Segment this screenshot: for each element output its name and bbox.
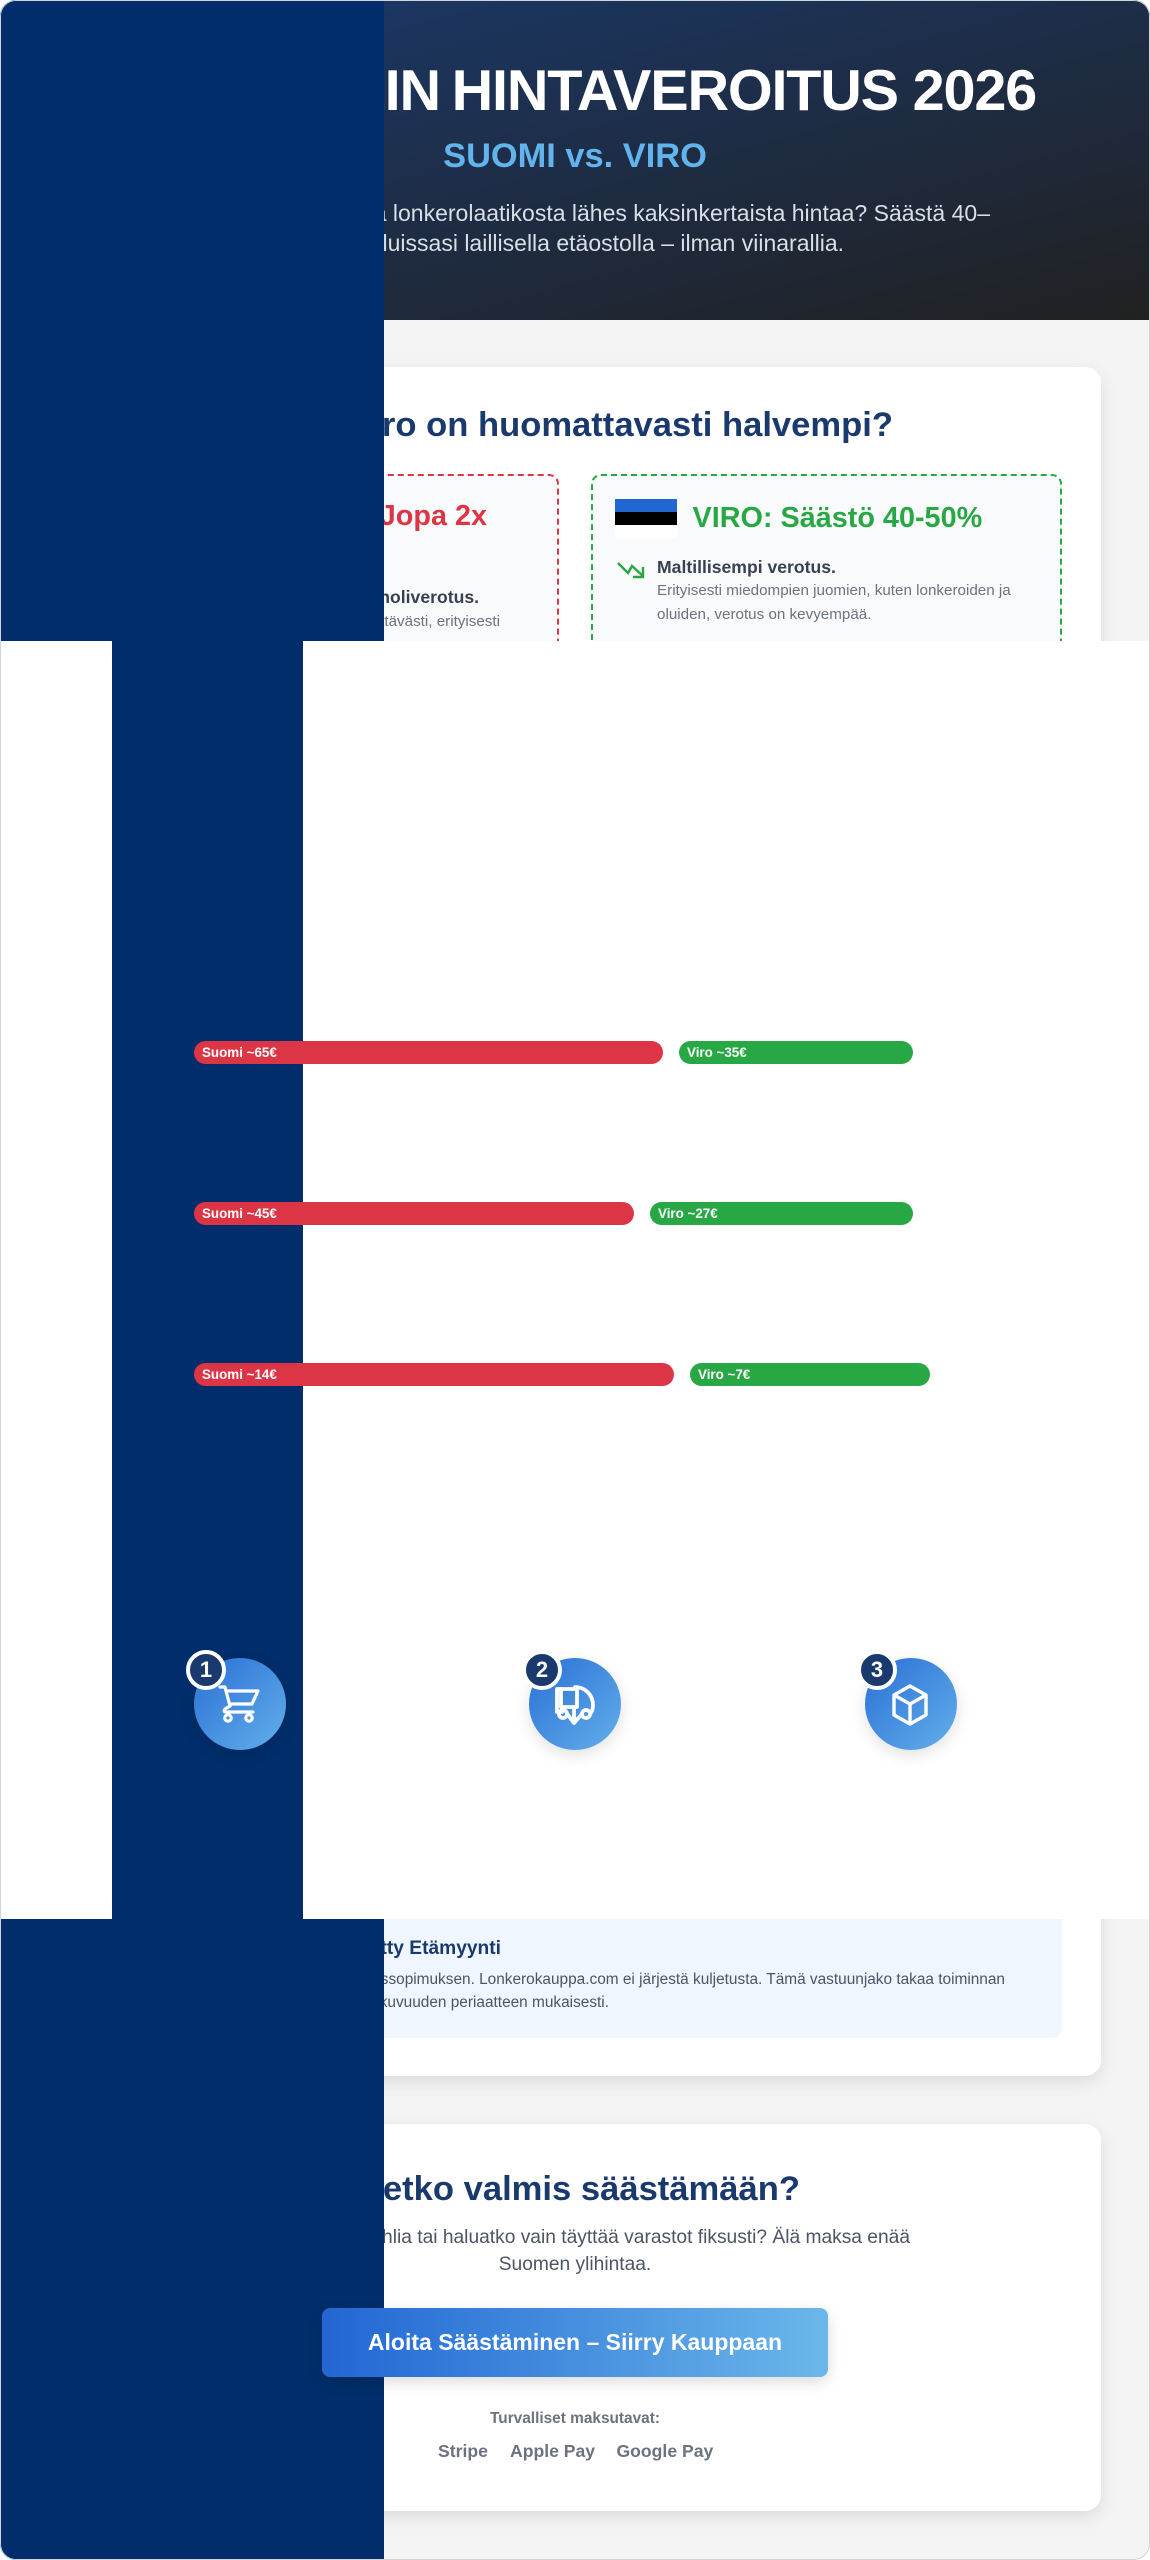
bar: Estonia 35: Viro ~35€ <box>687 1045 747 1060</box>
payment: Google Pay: Google Pay <box>616 2441 713 2461</box>
panel: Estonia <box>590 474 1062 1574</box>
panel: why Estonia is cheaper <box>49 367 1101 2076</box>
step 2 badge <box>522 1650 562 1690</box>
callout title: Laillisesti Toteutetty Etämyynti <box>220 1938 501 1959</box>
icon: cart <box>218 1685 260 1723</box>
bar: Finland 14 <box>194 1363 674 1386</box>
step 2 icon circle <box>529 1658 621 1750</box>
Estonia point text: Erityisesti miedompien juomien, kuten lonkeroiden ja <box>657 582 1011 599</box>
panel: Finland <box>88 474 559 1574</box>
bar: Estonia 27: Viro ~27€ <box>658 1206 718 1221</box>
icon: Estonian flag <box>615 499 677 525</box>
intro line 2: 50% kuluissasi laillisella etäostolla – ilman viinarallia. <box>306 230 844 256</box>
intro line 1: Miksi maksaa lonkerolaatikosta lähes kaksinkertaista hintaa? Säästä 40– <box>247 200 990 226</box>
payment: Apple Pay: Apple Pay <box>510 2441 595 2461</box>
bar: Finland 14: Suomi ~14€ <box>202 1367 277 1382</box>
step 3 icon circle <box>864 1658 956 1750</box>
blue masking block <box>0 0 384 2560</box>
chart: price comparison bars <box>194 1041 930 1386</box>
icon: box <box>892 1684 928 1726</box>
heading: Miksi Viro on huomattavasti halvempi? <box>254 406 893 444</box>
step 1 badge: 1 <box>200 1657 212 1682</box>
Estonia point title: Maltillisempi verotus. <box>657 557 836 577</box>
callout text line 2: vapaan liikkuvuuden periaatteen mukaisesti. <box>307 1994 609 2011</box>
subtitle: SUOMI vs. VIRO <box>443 137 707 175</box>
step 3 badge <box>857 1650 897 1690</box>
bar: Finland 65 <box>194 1041 663 1064</box>
header banner <box>0 0 1150 320</box>
CTA text line 1: Kaipaatko juhlia tai haluatko vain täyttää varastot fiksusti? Älä maksa enää <box>276 2227 910 2248</box>
step 3 badge: 3 <box>871 1657 883 1682</box>
icon: delivery truck <box>555 1685 595 1725</box>
callout: legal note <box>88 1666 1062 2038</box>
bar: Estonia 27 <box>650 1202 913 1225</box>
CTA button: Aloita Säästäminen – Siirry Kauppaan <box>368 2329 782 2355</box>
Finland heading: SUOMI: Jopa 2x <box>268 500 487 532</box>
bar: Finland 65: Suomi ~65€ <box>202 1045 277 1060</box>
step 2 badge: 2 <box>536 1657 548 1682</box>
bar: Finland 45 <box>194 1202 634 1225</box>
panel: call to action <box>49 2124 1101 2511</box>
Finland point title: Korkea alkoholiverotus. <box>280 587 479 607</box>
CTA heading: Oletko valmis säästämään? <box>346 2170 800 2208</box>
blue masking column <box>112 641 303 1919</box>
payment label: Turvalliset maksutavat: <box>490 2410 660 2427</box>
payment: Stripe: Stripe <box>438 2441 488 2461</box>
callout text: Asiakas tekee kuljetussopimuksen. Lonkerokauppa.com ei järjestä kuljetusta. Tämä vastuunjako takaa toiminnan <box>236 1971 1005 1988</box>
bar: Estonia 7: Viro ~7€ <box>698 1367 750 1382</box>
icon: trending down <box>617 562 644 578</box>
bar: Finland 45: Suomi ~45€ <box>202 1206 277 1221</box>
step 1 badge <box>186 1650 226 1690</box>
title: ALKOHOLIN HINTAVEROITUS 2026 <box>108 59 1036 123</box>
Estonia heading: VIRO: Säästö 40-50% <box>692 502 982 534</box>
CTA text line 2: Suomen ylihintaa. <box>499 2254 651 2275</box>
bar: Estonia 35 <box>679 1041 913 1064</box>
bar: Estonia 7 <box>690 1363 930 1386</box>
Finland point text: Verotus on merkittävästi, erityisesti <box>266 613 500 630</box>
Estonia point text <box>657 582 1011 623</box>
step 1 icon circle <box>194 1658 286 1750</box>
CTA button <box>322 2308 828 2377</box>
Estonia point text: oluiden, verotus on kevyempää. <box>657 606 871 623</box>
white masking block <box>0 641 1150 1919</box>
